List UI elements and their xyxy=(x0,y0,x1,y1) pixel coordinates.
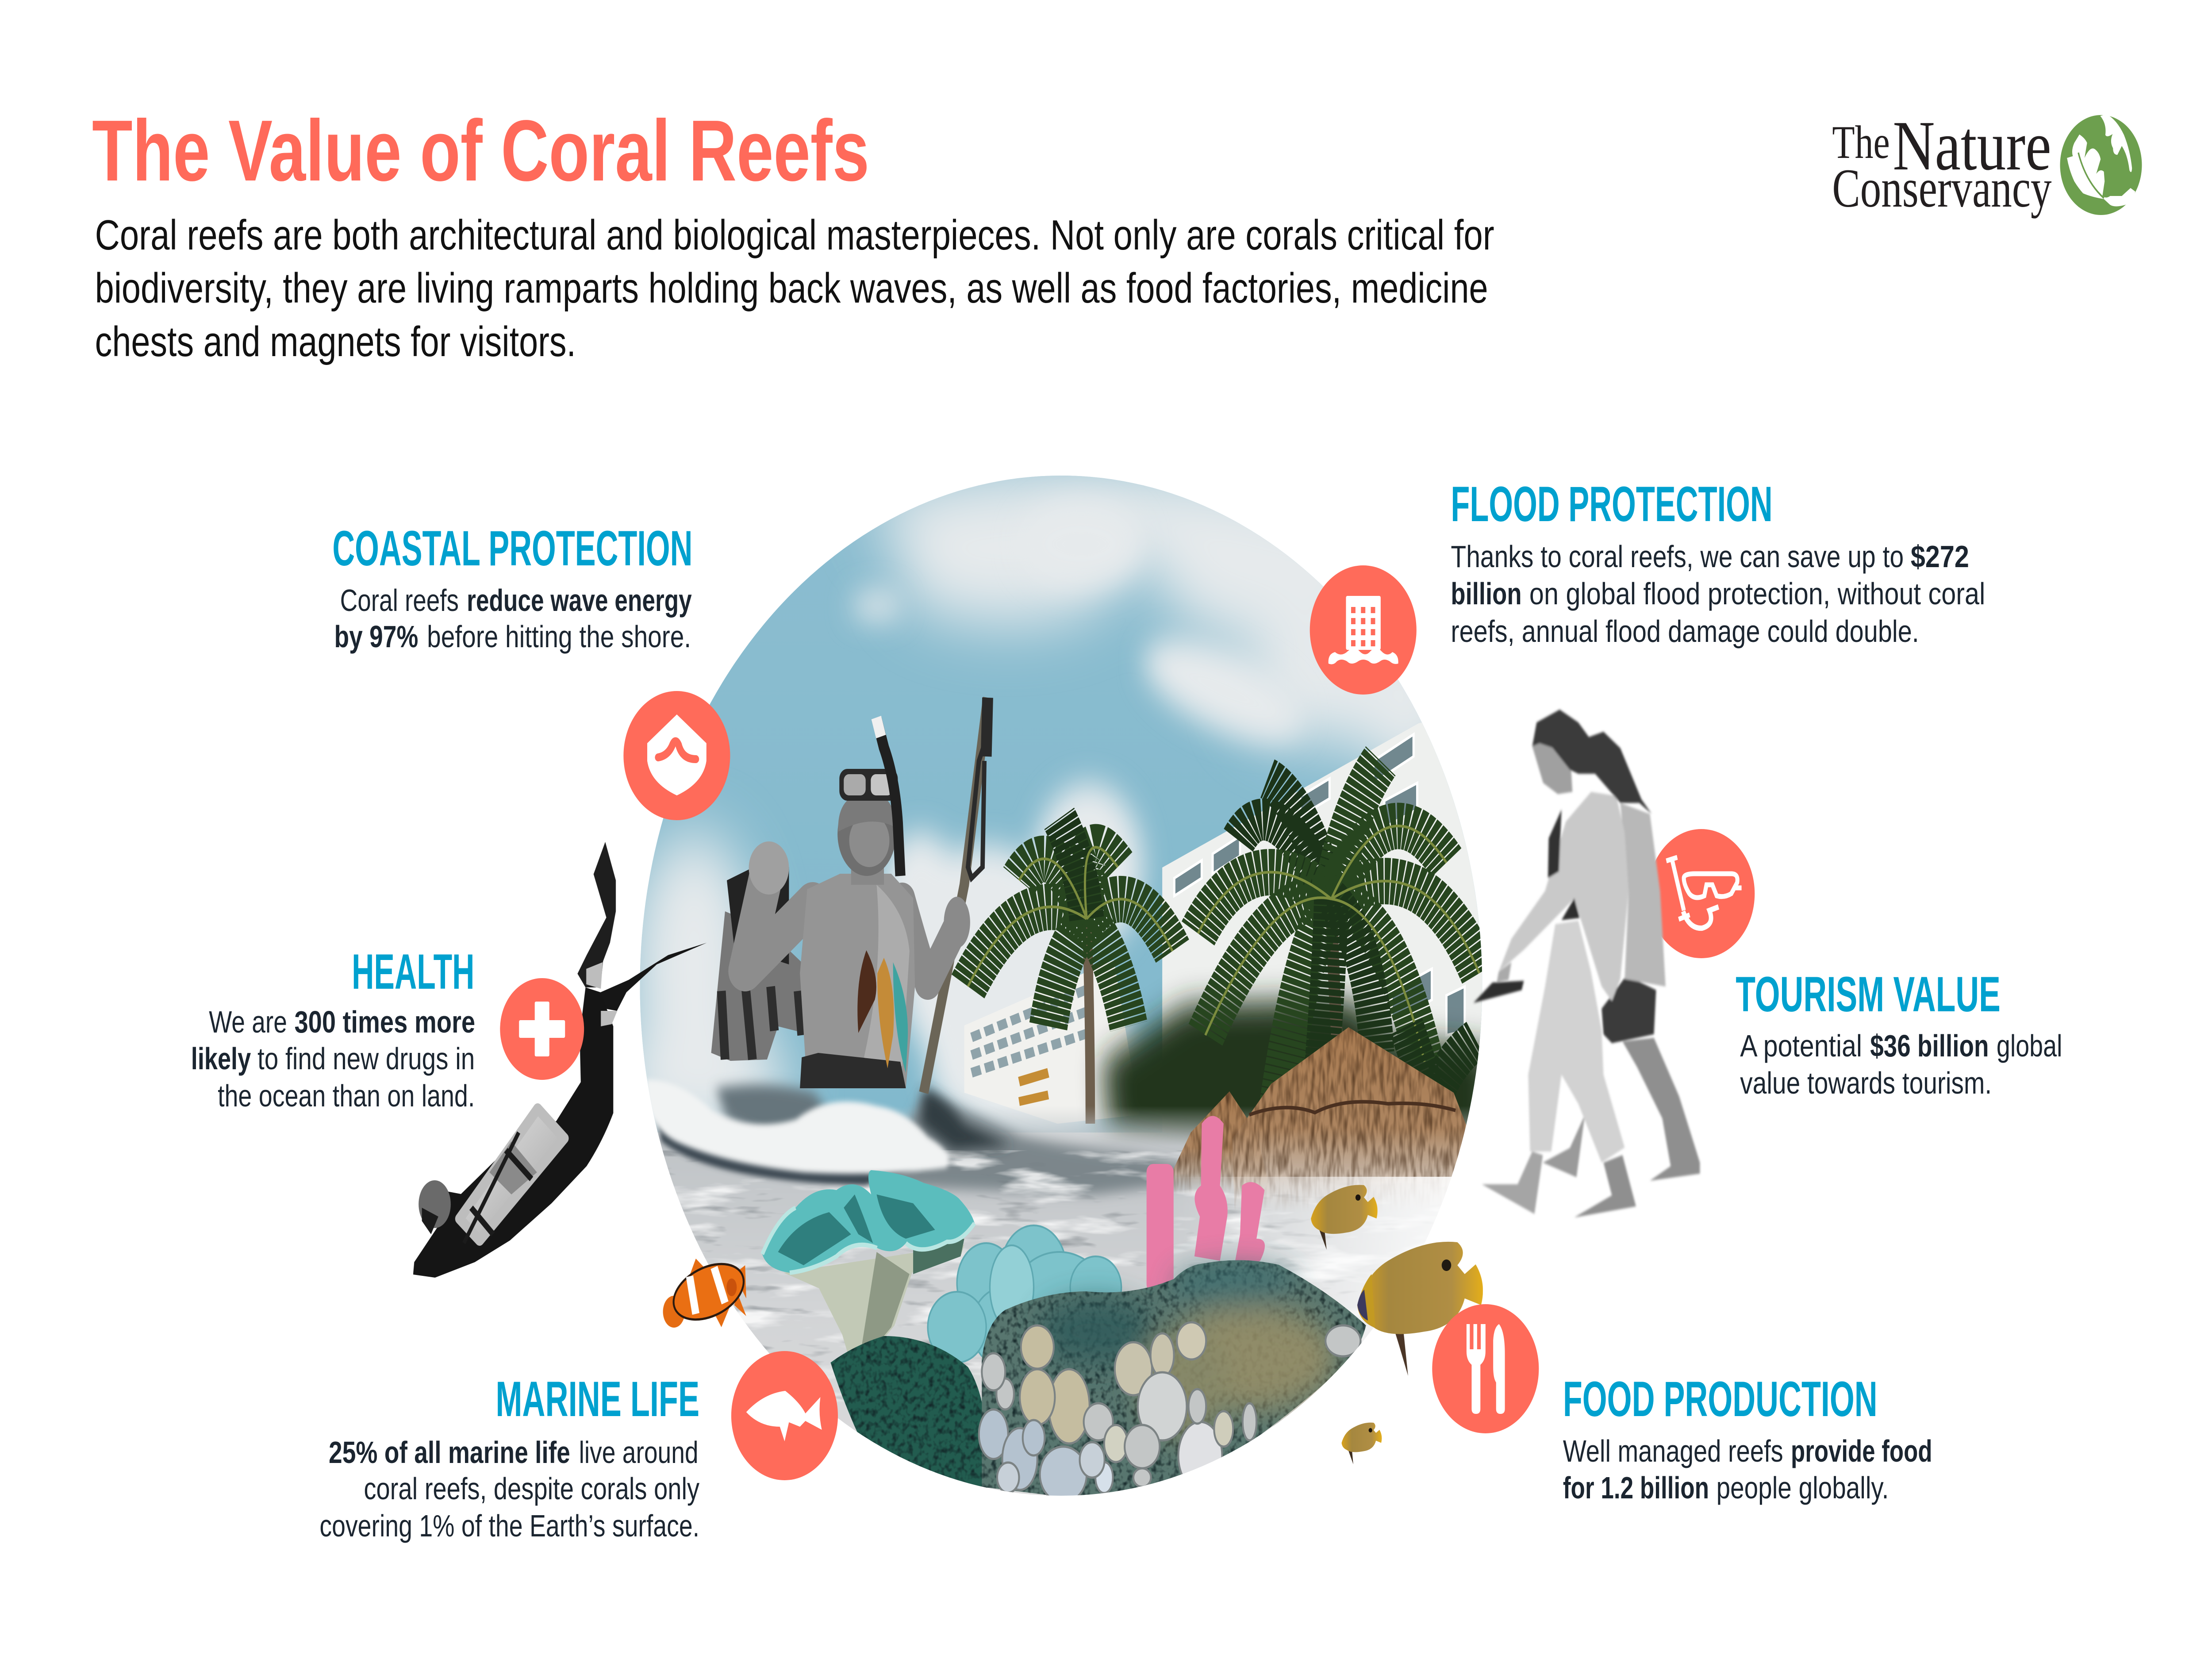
body: billion xyxy=(1451,576,1522,611)
small angelfish lower xyxy=(1342,1423,1382,1464)
scuba tank xyxy=(460,1109,565,1243)
icon: coastal protection shield xyxy=(623,691,730,820)
body: by 97% xyxy=(334,619,418,654)
text: coastal protection xyxy=(332,521,692,654)
icon: marine life fish xyxy=(731,1351,838,1480)
pink sponge coral xyxy=(1147,1116,1265,1292)
fins xyxy=(711,860,813,1061)
logo globe with leaf xyxy=(2060,114,2142,215)
body: on global flood protection, without coral xyxy=(1529,576,1985,611)
small angelfish upper xyxy=(1311,1185,1378,1250)
hand on spear xyxy=(944,897,970,948)
sandal xyxy=(1474,981,1524,1003)
wave xyxy=(646,1079,1012,1186)
body xyxy=(319,1435,699,1543)
shorts xyxy=(800,1053,906,1088)
heading: MARINE LIFE xyxy=(495,1371,699,1427)
head xyxy=(837,792,896,885)
front walker trousers xyxy=(1528,921,1624,1163)
body: 300 times more xyxy=(294,1005,475,1039)
central scene circle xyxy=(614,469,1498,1509)
body xyxy=(1740,1029,2062,1100)
lower-right palm xyxy=(1406,1026,1476,1106)
large angelfish xyxy=(1357,1242,1483,1376)
clouds xyxy=(614,469,1465,1141)
text: food production xyxy=(1563,1371,1932,1505)
heading: COASTAL PROTECTION xyxy=(332,521,692,576)
spear sling xyxy=(968,743,985,878)
front feet xyxy=(1482,1152,1543,1214)
arms and torso xyxy=(745,872,957,1088)
mushroom coral xyxy=(762,1170,975,1375)
intro paragraph: chests and magnets for visitors. xyxy=(95,318,576,365)
body: A potential xyxy=(1740,1029,1862,1063)
body: $272 xyxy=(1911,539,1969,574)
text: marine life xyxy=(319,1371,699,1543)
body: reefs, annual flood damage could double. xyxy=(1451,614,1919,649)
bubble coral xyxy=(928,1225,1121,1367)
coral boulders xyxy=(979,1322,1360,1502)
body: covering 1% of the Earth’s surface. xyxy=(319,1509,699,1543)
shorts xyxy=(1601,975,1656,1043)
intro paragraph xyxy=(95,211,1494,365)
icon: tourism snorkel mask xyxy=(1648,829,1755,958)
diver fin upper xyxy=(577,842,616,987)
dive mask xyxy=(839,769,898,801)
heading: FLOOD PROTECTION xyxy=(1451,476,1773,532)
snorkel xyxy=(877,719,900,876)
right palm tree xyxy=(1198,761,1479,1106)
intro paragraph: biodiversity, they are living ramparts holding back waves, as well as food factories, medicine xyxy=(95,264,1488,312)
rear walker blouse xyxy=(1620,803,1666,987)
sky xyxy=(636,469,1490,1133)
logo wordmark: Conservancy xyxy=(1832,158,2052,219)
left palm tree xyxy=(968,818,1172,1124)
body: for 1.2 billion xyxy=(1563,1471,1709,1505)
hotel building left xyxy=(964,960,1140,1124)
body: 25% of all marine life xyxy=(329,1435,570,1470)
dark green coral mound xyxy=(830,1336,988,1504)
heading: FOOD PRODUCTION xyxy=(1563,1371,1878,1427)
diver fin long xyxy=(600,943,707,1011)
body: live around xyxy=(579,1435,699,1470)
anemone reef xyxy=(979,1260,1366,1502)
body: value towards tourism. xyxy=(1740,1066,1992,1100)
body: to find new drugs in xyxy=(257,1041,475,1076)
right fade to white xyxy=(1169,1177,1498,1354)
intro paragraph: Coral reefs are both architectural and biological masterpieces. Not only are corals critical for xyxy=(95,211,1494,259)
diver head xyxy=(419,1180,451,1234)
title: The Value of Coral Reefs xyxy=(92,102,869,200)
heading: TOURISM VALUE xyxy=(1736,967,2001,1022)
body: people globally. xyxy=(1717,1471,1889,1505)
body: likely xyxy=(191,1041,251,1076)
logo wordmark: Nature xyxy=(1893,106,2051,185)
body: provide food xyxy=(1791,1434,1932,1468)
heading: HEALTH xyxy=(352,944,474,999)
face xyxy=(1532,734,1572,794)
icon: flood protection building xyxy=(1310,565,1417,695)
text: flood protection xyxy=(1451,476,1985,649)
body: Well managed reefs xyxy=(1563,1434,1783,1468)
body: global xyxy=(1997,1029,2062,1063)
caught fish xyxy=(857,950,908,1073)
waist shadow xyxy=(1562,898,1580,920)
diver ankle skin xyxy=(586,962,617,1026)
logo: The Nature Conservancy xyxy=(1832,106,2142,219)
hand holding sandal xyxy=(1497,962,1511,982)
body: the ocean than on land. xyxy=(218,1079,475,1113)
couple walking xyxy=(1474,710,1700,1217)
body: before hitting the shore. xyxy=(427,619,691,654)
body: reduce wave energy xyxy=(467,583,692,618)
dark bushes behind palms xyxy=(1103,1000,1494,1168)
text: tourism value xyxy=(1736,967,2062,1100)
hotel building right xyxy=(1162,708,1490,1133)
hair xyxy=(1532,710,1651,814)
text: health xyxy=(191,944,475,1113)
body: We are xyxy=(209,1005,287,1039)
sea and sand xyxy=(636,1093,1490,1509)
logo wordmark xyxy=(1832,106,2052,219)
body xyxy=(191,1005,475,1113)
body: $36 billion xyxy=(1870,1029,1989,1063)
man with spear and fins xyxy=(711,698,987,1093)
body: coral reefs, despite corals only xyxy=(364,1471,699,1506)
body xyxy=(1563,1434,1932,1505)
diver xyxy=(413,842,707,1278)
raised hand xyxy=(749,841,789,895)
diver body xyxy=(413,987,613,1278)
logo wordmark: The xyxy=(1832,116,1890,169)
spear xyxy=(924,698,987,1093)
body: Thanks to coral reefs, we can save up to xyxy=(1451,539,1904,574)
thatched huts xyxy=(1161,1027,1472,1212)
front walker blouse xyxy=(1499,792,1628,1001)
body xyxy=(334,583,692,654)
icon: food production cutlery xyxy=(1432,1304,1539,1433)
clownfish xyxy=(663,1253,750,1330)
body xyxy=(1451,539,1985,649)
body: Coral reefs xyxy=(340,583,459,618)
rear foot of front walker xyxy=(1543,1115,1585,1177)
icon: health cross xyxy=(500,978,584,1080)
back legs xyxy=(1622,1038,1700,1181)
